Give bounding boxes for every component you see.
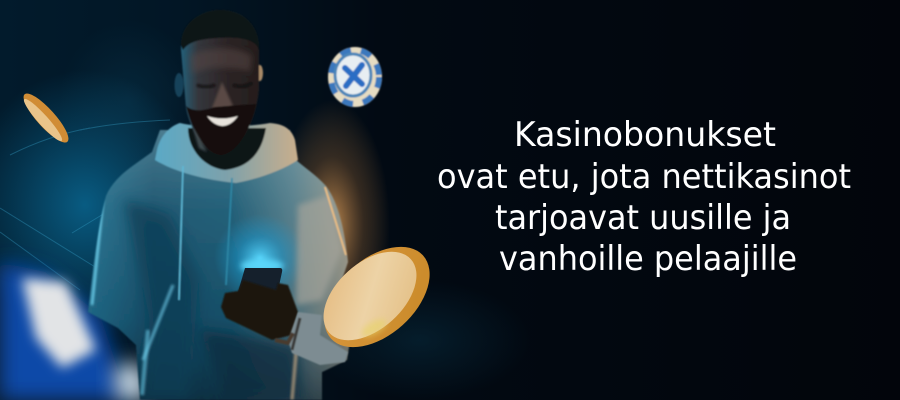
icon: blue and white poker chip	[328, 47, 382, 107]
phone	[238, 259, 284, 295]
ears	[174, 73, 184, 97]
sleeve seams and body shading	[92, 187, 346, 400]
hoodie top lighting	[88, 130, 350, 400]
headline text: vanhoille pelaajille	[499, 239, 797, 279]
hoodie body	[88, 130, 350, 400]
hoodie strings	[179, 166, 232, 300]
light streaks	[0, 120, 320, 385]
hand	[221, 280, 298, 340]
hood opening	[188, 128, 266, 170]
hood	[155, 123, 298, 183]
nose and cheek light	[212, 82, 233, 112]
background glows	[0, 54, 495, 380]
beard grey side	[192, 125, 207, 152]
man	[88, 10, 350, 400]
cuff and watch	[275, 312, 348, 365]
phone light on hoodie	[218, 218, 298, 290]
headline text: tarjoavat uusille ja	[495, 198, 791, 238]
headline text: Kasinobonukset	[514, 115, 776, 155]
icon: small gold coin	[18, 88, 74, 148]
eyes	[197, 83, 252, 87]
headline text	[437, 115, 851, 279]
beard	[186, 104, 256, 155]
head	[181, 10, 259, 155]
headline text: ovat etu, jota nettikasinot	[437, 157, 851, 197]
icon: large gold coin	[305, 227, 449, 367]
forehead highlight	[190, 48, 252, 74]
hair	[181, 10, 259, 50]
blurred Finnish flag	[0, 262, 150, 400]
smile	[207, 116, 238, 126]
